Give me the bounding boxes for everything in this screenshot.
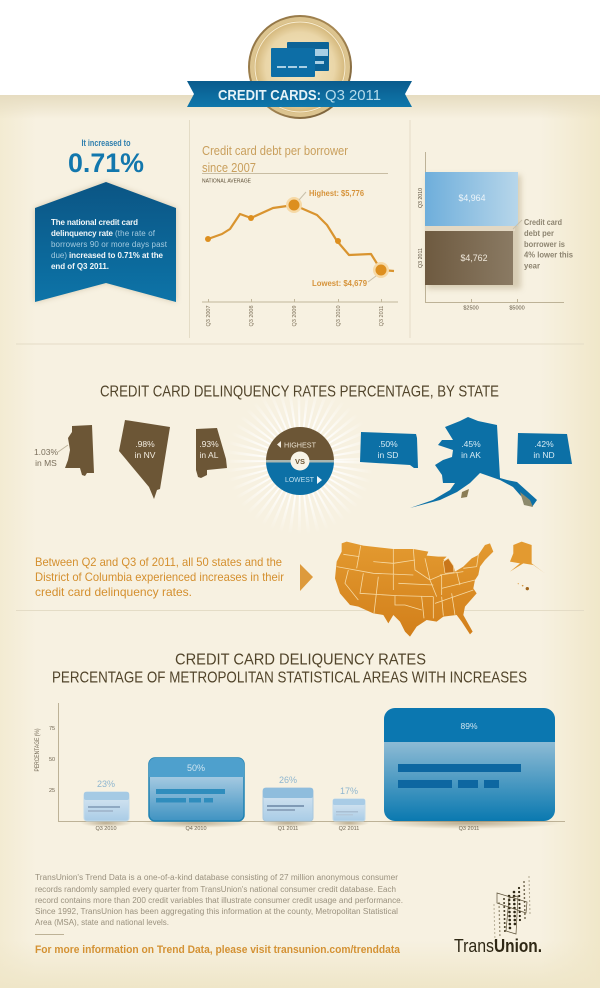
callout: chevron text: The national credit card: [51, 218, 138, 227]
highest vs lowest badge: HIGHEST: [284, 440, 316, 450]
axes: [425, 152, 564, 302]
label: highest: Highest: $5,776: [309, 188, 364, 198]
state: North Dakota: .42%: [534, 439, 554, 449]
card bar chart axes: 50: [49, 757, 55, 763]
icon: credit cards: [271, 42, 329, 77]
bar: Q3 2010: [425, 172, 518, 226]
text block: about Trend Data: Area (MSA), state and national levels.: [35, 918, 169, 927]
bar: Q3 2011: [425, 231, 513, 285]
state: Alabama: .93%: [199, 439, 219, 449]
card bar chart axes: 25: [49, 788, 55, 794]
logo: TransUnion: [454, 877, 542, 956]
stat lead-in: It increased to: [82, 138, 131, 148]
card bar chart axes: [35, 703, 565, 822]
highest vs lowest badge: LOWEST: [285, 475, 314, 484]
card bar: Q3 2010: [80, 779, 132, 832]
panel: debt per borrower line chart: [202, 144, 398, 327]
data points: [205, 197, 389, 278]
state: Alaska: [410, 417, 537, 508]
axis labels: $2500: [463, 306, 479, 312]
chart title: NATIONAL AVERAGE: [202, 178, 251, 184]
state: Alaska: in AK: [461, 450, 481, 460]
heading: metropolitan areas: CREDIT CARD DELIQUENCY RATES: [175, 652, 426, 668]
text block: about Trend Data: [35, 873, 403, 927]
link line: For more information on Trend Data, please visit transunion.com/trenddata: [35, 944, 401, 956]
logo: TransUnion: Trans: [454, 936, 494, 956]
card bar: Q2 2011: 17%: [340, 786, 358, 796]
card bar: Q4 2010: [142, 758, 250, 832]
chart title: since 2007: [202, 161, 256, 175]
text block: all states increased: [35, 555, 284, 599]
card bar chart axes: 75: [49, 726, 55, 732]
panel dividers: [16, 120, 584, 610]
title ribbon: Q3 2011: [325, 87, 381, 104]
axis labels: Q3 2011: [418, 248, 424, 268]
logo: TransUnion: Union.: [494, 936, 542, 956]
title ribbon: CREDIT CARDS:: [218, 87, 321, 104]
callout: 4% lower: 4% lower this: [524, 250, 573, 260]
header medallion: [248, 15, 352, 119]
text block: all states increased: credit card delinquency rates.: [35, 585, 192, 599]
card bar: Q4 2010: Q4 2010: [185, 826, 207, 832]
axis labels: Q3 2008: [249, 305, 255, 327]
callout: chevron text: borrowers 90 or more days past: [51, 240, 168, 249]
highest vs lowest badge: [246, 407, 354, 515]
state: Mississippi: 1.03%: [34, 447, 58, 457]
state: Nevada: .98%: [135, 439, 155, 449]
chevron shadow: [35, 182, 176, 302]
arrow: [300, 564, 313, 591]
card bar chart axes: PERCENTAGE (%): [35, 728, 41, 772]
callout: 4% lower: borrower is: [524, 239, 565, 249]
axis labels: Q3 2010: [336, 305, 342, 327]
text block: about Trend Data: records randomly sampled every quarter from TransUnion's national consumer credit database. Each: [35, 885, 396, 894]
callout: chevron text: increased to 0.71% at the: [69, 251, 164, 260]
label: highest: [299, 188, 364, 200]
title ribbon: [187, 81, 412, 107]
chart title: [202, 144, 388, 184]
card bar: Q1 2011: Q1 2011: [278, 826, 298, 832]
highest vs lowest badge: VS: [295, 457, 305, 466]
callout: 4% lower: Credit card: [524, 217, 562, 227]
text block: about Trend Data: record contains more than 200 credit variables that illustrate consumer credit usage and performance.: [35, 896, 403, 905]
chart title: Credit card debt per borrower: [202, 144, 348, 158]
stat value: 0.71%: [68, 148, 144, 178]
card bar: Q1 2011: [259, 775, 317, 832]
chart axis: [202, 299, 398, 302]
axis labels: Q3 2011: [379, 306, 385, 326]
axis labels: Q3 2010: [418, 188, 424, 208]
panel: year over year bar chart: [418, 152, 573, 312]
callout: chevron text: [35, 182, 176, 302]
state: Alabama: in AL: [200, 450, 219, 460]
text block: all states increased: Between Q2 and Q3 of 2011, all 50 states and the: [35, 555, 282, 569]
text block: about Trend Data: Since 1992, TransUnion has been aggregating this information at the county, Metropolitan Statistical: [35, 907, 398, 916]
axis labels: $5000: [509, 306, 525, 312]
text block: all states increased: District of Columbia experienced increases in their: [35, 570, 284, 584]
bar: Q3 2010: $4,964: [458, 193, 486, 203]
callout: chevron text: end of Q3 2011.: [51, 262, 109, 271]
line series: [208, 205, 394, 271]
state: Nevada: [119, 420, 170, 499]
axis labels: Q3 2009: [292, 305, 298, 327]
state: North Dakota: [517, 433, 572, 464]
card bar: Q3 2011: 89%: [460, 721, 478, 731]
card bar: Q3 2011: Q3 2011: [459, 826, 479, 832]
icon: Alaska and Hawaii: [510, 542, 545, 590]
card bar: Q4 2010: 50%: [187, 763, 205, 773]
axis labels: [418, 188, 525, 312]
state: Alaska: .45%: [461, 439, 481, 449]
US map: [335, 542, 545, 637]
axis labels: Q3 2007: [206, 305, 212, 327]
callout: chevron text: delinquency rate: [51, 229, 114, 238]
card bar: Q2 2011: Q2 2011: [339, 826, 359, 832]
bar: Q3 2011: $4,762: [460, 253, 488, 263]
state: South Dakota: [360, 432, 418, 468]
state: Mississippi: [34, 425, 94, 476]
card bar: Q3 2011: [377, 708, 561, 832]
heading: metropolitan areas: [52, 652, 527, 686]
card bar: Q1 2011: 26%: [279, 775, 297, 785]
bar shadow: [427, 175, 521, 289]
callout: chevron text: (the rate of: [115, 229, 156, 238]
heading: metropolitan areas: PERCENTAGE OF METROPOLITAN STATISTICAL AREAS WITH INCREASES: [52, 670, 527, 686]
panel: delinquency rate: [35, 138, 176, 302]
card bar: Q3 2010: Q3 2010: [95, 826, 117, 832]
callout: 4% lower: debt per: [524, 228, 555, 238]
callout: 4% lower: year: [524, 260, 541, 270]
state: North Dakota: in ND: [533, 450, 555, 460]
label: lowest: Lowest: $4,679: [312, 278, 367, 288]
state: South Dakota: in SD: [378, 450, 398, 460]
card bar: Q3 2010: 23%: [97, 779, 115, 789]
heading: rates by state: CREDIT CARD DELINQUENCY RATES PERCENTAGE, BY STATE: [100, 384, 499, 400]
state: South Dakota: .50%: [378, 439, 398, 449]
state: Mississippi: in MS: [35, 458, 57, 468]
text block: about Trend Data: TransUnion's Trend Data is a one-of-a-kind database consisting of 27 million anonymous consumer: [35, 873, 398, 882]
card bar: Q2 2011: [329, 786, 369, 832]
state: Alabama: [196, 428, 227, 478]
callout: chevron text: due): [51, 251, 67, 260]
callout: 4% lower: [513, 217, 573, 270]
state: Nevada: in NV: [135, 450, 156, 460]
axis labels: [206, 305, 385, 327]
